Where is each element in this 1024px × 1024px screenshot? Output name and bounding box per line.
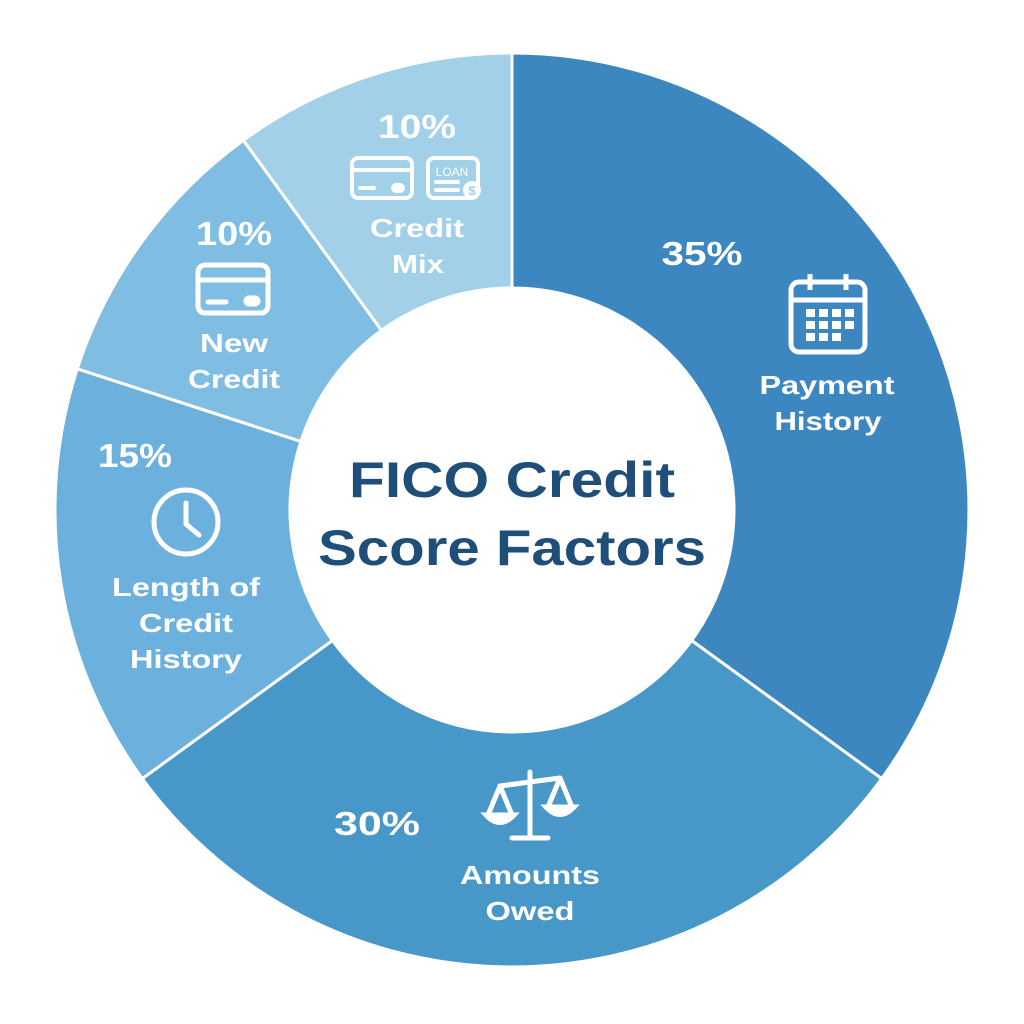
label: credit mix (352, 108, 481, 279)
title: Score Factors (318, 520, 706, 576)
label: amounts owed: Owed (486, 896, 574, 926)
label: new credit: Credit (188, 364, 280, 394)
label: payment history: History (774, 406, 882, 436)
icon: clock (154, 490, 218, 554)
label: length of credit history: Length of (112, 572, 260, 602)
label: amounts owed: 30% (334, 805, 420, 842)
label: credit mix: Mix (392, 249, 445, 279)
segment: amounts owed (142, 640, 882, 967)
segment: credit mix (243, 53, 512, 330)
label: new credit: New (200, 328, 269, 358)
icon: calendar (791, 274, 865, 352)
label: length of credit history (98, 437, 260, 674)
label: amounts owed: Amounts (460, 860, 600, 890)
label: credit mix: 10% (378, 108, 456, 145)
label: new credit (188, 215, 280, 394)
label: payment history: Payment (760, 370, 895, 400)
icon: scales (486, 772, 574, 838)
segment: new credit (77, 140, 382, 441)
label: credit mix: LOAN (436, 165, 468, 179)
segment: payment history (512, 53, 969, 779)
icon: credit card (198, 265, 268, 313)
label: length of credit history: 15% (98, 437, 172, 474)
icon: card and loan (352, 158, 481, 199)
segment: length of credit history (55, 369, 332, 779)
donut chart (55, 53, 969, 967)
label: credit mix: $ (468, 183, 476, 198)
label: length of credit history: Credit (139, 608, 233, 638)
label: payment history: 35% (662, 235, 742, 272)
title: FICO Credit (349, 452, 675, 508)
label: payment history (662, 235, 895, 436)
title (318, 452, 706, 576)
label: length of credit history: History (130, 644, 243, 674)
label: amounts owed (334, 772, 600, 926)
label: credit mix: Credit (370, 213, 464, 243)
label: new credit: 10% (196, 215, 272, 252)
